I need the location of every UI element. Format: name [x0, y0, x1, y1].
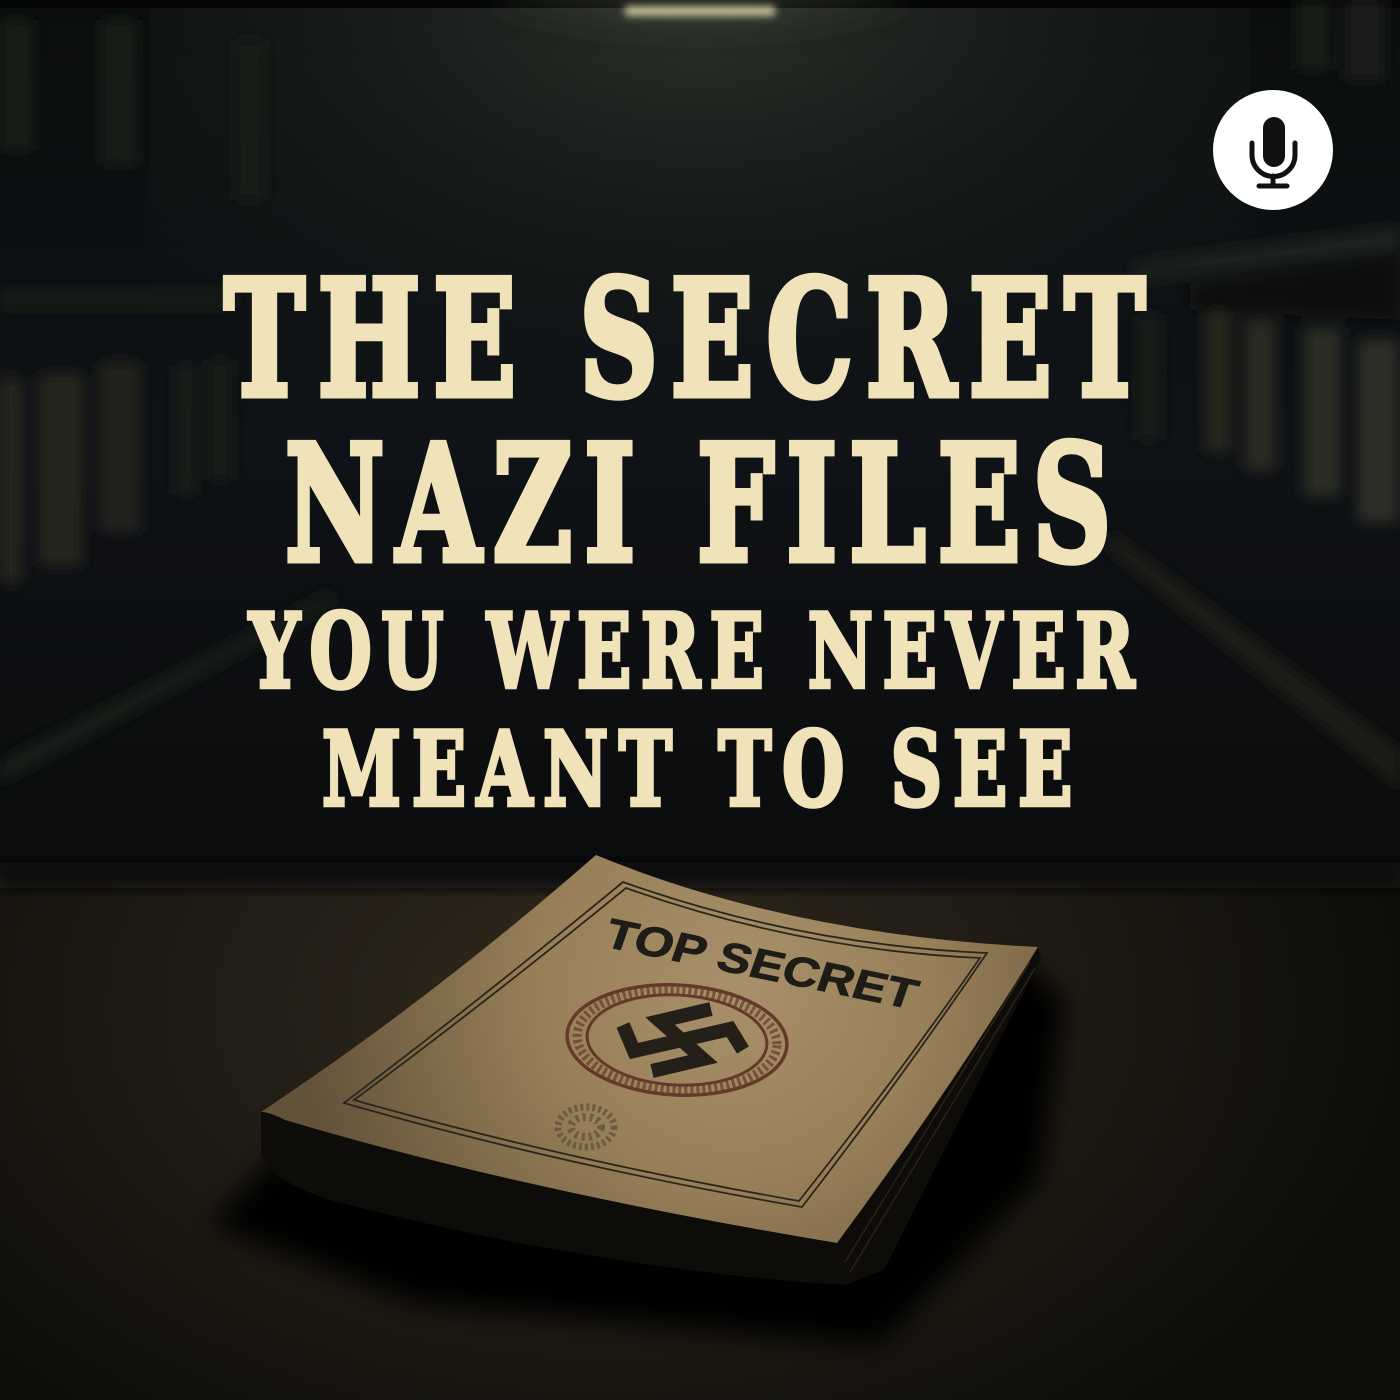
- red seal: [564, 979, 790, 1101]
- title: [224, 246, 1145, 829]
- stamped text: top secret: TOP SECRET: [599, 910, 924, 1018]
- title line 1: THE SECRET: [224, 246, 1145, 434]
- title line 2: NAZI FILES: [285, 411, 1111, 599]
- folder cover: [261, 855, 1038, 1243]
- top secret folder: [261, 855, 1041, 1285]
- title line 3: YOU WERE NEVER: [248, 591, 1135, 711]
- icon: microphone badge: [1213, 90, 1333, 210]
- folder pages: [261, 947, 1041, 1285]
- archive wall background: [0, 0, 1400, 890]
- title line 4: MEANT TO SEE: [322, 709, 1072, 829]
- faded crest stamp: [558, 1107, 614, 1147]
- blurred left shelves: [0, 20, 336, 785]
- blurred right shelves: [1110, 0, 1400, 790]
- folder shadow: [210, 960, 1065, 1345]
- cover double border: [344, 882, 987, 1207]
- seal emblem: [623, 1009, 743, 1071]
- wooden table: [0, 862, 1400, 1400]
- ceiling lamp glow: [490, 0, 910, 80]
